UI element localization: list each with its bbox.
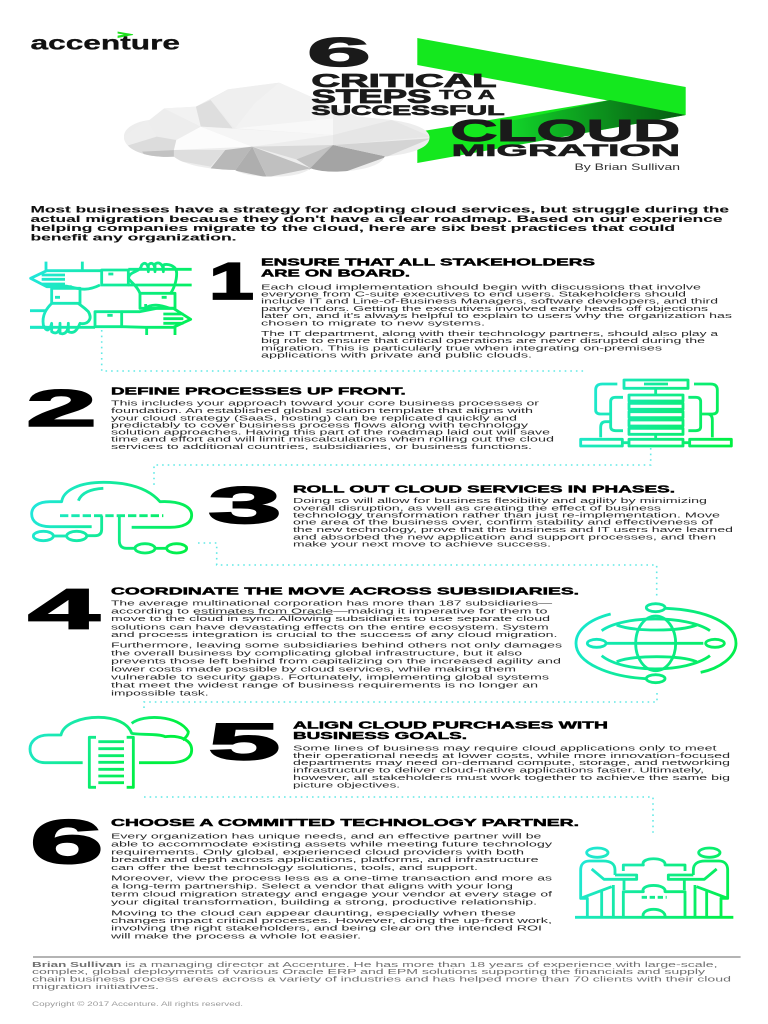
header graphic: green chevron: [417, 38, 686, 163]
byline: By Brian Sullivan: [574, 162, 680, 173]
step 2 text: [111, 386, 554, 451]
number 1: 1: [209, 253, 254, 311]
step 2 body: [111, 399, 554, 451]
step 1 text: [261, 258, 732, 360]
step 6 body: Every organization has unique needs, and an effective partner will be: [111, 831, 541, 840]
step 2 body: predictably to cover business process flows along with technology: [111, 420, 528, 429]
step 3 body: and absorbed the new application and support processes, and then: [293, 532, 716, 541]
step 3 text: [293, 484, 733, 548]
author bio: migration initiatives.: [32, 982, 159, 991]
step 1 body: big role to ensure that critical operations are never disrupted during the: [261, 336, 705, 345]
step 1 body: party vendors. Getting the executives involved early heads off objections: [261, 304, 708, 313]
step 3 body: Doing so will allow for business flexibility and agility by minimizing: [293, 496, 707, 505]
step 4 text: [111, 587, 579, 698]
icon: server stack: [581, 380, 731, 446]
step 3 heading: ROLL OUT CLOUD SERVICES IN PHASES.: [293, 484, 675, 495]
step 1 body: [261, 282, 732, 360]
step 5 body: picture objectives.: [293, 781, 400, 790]
header graphic: low-poly cloud: [122, 80, 431, 178]
step 5 heading: [293, 720, 608, 742]
step 1 body: applications with private and public clouds.: [261, 351, 532, 360]
number 6: 6: [30, 807, 103, 876]
title: STEPS: [312, 87, 432, 108]
step 5 heading: ALIGN CLOUD PURCHASES WITH: [293, 720, 608, 731]
step 6 body: changes impact critical processes. However, doing the up-front work,: [111, 916, 552, 925]
step 6 body: Moving to the cloud can appear daunting, especially when these: [111, 909, 516, 918]
step 1 body: later on, and it's always helpful to explain to users why the organization has: [261, 311, 732, 320]
step 2 body: your cloud strategy (SaaS, hosting) can be replicated quickly and: [111, 413, 517, 422]
author bio: chain business process areas across a variety of industries and has helped more than 70 clients with their cloud: [32, 974, 731, 983]
title: CLOUD: [451, 113, 680, 148]
step 1 heading: [261, 258, 596, 279]
intro text: Most businesses have a strategy for adopting cloud services, but struggle during the: [30, 204, 729, 214]
step 4 body: The average multinational corporation has more than 187 subsidiaries—: [111, 598, 553, 608]
step 3 body: technology transformation rather than just re-implementation. Move: [293, 511, 720, 520]
step 4 body: according to estimates from Oracle—making it imperative for them to: [111, 606, 548, 615]
title: SUCCESSFUL: [312, 102, 505, 118]
step 5 heading: BUSINESS GOALS.: [293, 731, 467, 742]
step 3 body: [293, 496, 733, 548]
step 2 body: This includes your approach toward your core business processes or: [111, 399, 540, 408]
step 2 body: services to additional countries, subsidiaries, or business functions.: [111, 442, 532, 451]
step 4 body: prevents those left behind from capitalizing on the increased agility and: [111, 657, 561, 666]
step 1 heading: ARE ON BOARD.: [261, 268, 410, 279]
intro text: actual migration because they don't have a clear roadmap. Based on our experience: [30, 214, 722, 224]
step 1 body: The IT department, along with their technology partners, should also play a: [261, 329, 719, 338]
step 1 body: include IT and Line-of-Business Managers, software developers, and third: [261, 297, 718, 306]
icon: four interlocked hands: [30, 262, 192, 335]
step 4 heading: COORDINATE THE MOVE ACROSS SUBSIDIARIES.: [111, 587, 579, 598]
step 5 body: departments may need on-demand compute, storage, and networking: [293, 758, 730, 767]
number 2: 2: [26, 379, 97, 437]
step 6 body: able to accommodate existing assets while meeting future technology: [111, 840, 552, 849]
icon: cloud network: [32, 482, 192, 553]
step 6 body: a long-term partnership. Select a vendor that aligns with your long: [111, 882, 513, 891]
step 5 body: their operational needs at lower costs, while more innovation-focused: [293, 751, 730, 760]
copyright: Copyright © 2017 Accenture. All rights reserved.: [32, 1000, 243, 1008]
intro text: [30, 204, 729, 242]
number 4: 4: [28, 578, 100, 641]
step 3 body: overall disruption, as well as creating the effect of business: [293, 503, 661, 512]
logo: accenture: [30, 32, 180, 54]
step 4 body: and process integration is crucial to the success of any cloud migration.: [111, 630, 558, 639]
step 4 body: the overall business by complicating global infrastructure, but it also: [111, 649, 522, 658]
divider rule: [33, 956, 741, 958]
connector 1 to 2: [102, 330, 586, 371]
step 3 body: one area of the business over, confirm stability and effectiveness of: [293, 518, 715, 527]
step 1 body: everyone from C-suite executives to end users. Stakeholders should: [261, 290, 686, 298]
logo: accenture: accenture: [30, 34, 180, 54]
title: TO A: [439, 87, 496, 102]
step 3 body: make your next move to achieve success.: [293, 539, 551, 548]
icon: cloud with ladder: [30, 717, 192, 787]
step 6 body: requirements. Only global, experienced cloud providers with both: [111, 847, 524, 856]
step 5 text: [293, 720, 730, 790]
step 5 body: [293, 744, 730, 790]
connector 3 to 4: [198, 543, 657, 597]
connector 2 to 3: [154, 448, 651, 485]
step 1 body: chosen to migrate to new systems.: [261, 318, 485, 327]
intro text: helping companies migrate to the cloud, here are six best practices that could: [30, 223, 675, 233]
step 4 body: solutions can have devastating effects on the entire ecosystem. System: [111, 622, 549, 631]
intro text: benefit any organization.: [30, 232, 236, 242]
step 6 body: involving the right stakeholders, and being clear on the intended ROI: [111, 924, 542, 933]
step 4 body: Furthermore, leaving some subsidiaries behind others not only damages: [111, 641, 562, 650]
step 5 body: however, all stakeholders must work together to achieve the same big: [293, 773, 730, 782]
step 6 body: Moreover, view the process less as a one-time transaction and more as: [111, 874, 552, 883]
connector 4 to 5: [144, 693, 657, 708]
step 1 body: migration. This is particularly true when integrating on-premises: [261, 344, 662, 352]
step 1 heading: ENSURE THAT ALL STAKEHOLDERS: [261, 258, 596, 269]
step 4 body: lower costs made possible by cloud services, while making them: [111, 665, 516, 674]
step 6 body: will make the process a whole lot easier.: [109, 932, 361, 941]
step 5 body: Some lines of business may require cloud applications only to meet: [293, 744, 718, 753]
step 2 heading: DEFINE PROCESSES UP FRONT.: [111, 386, 406, 397]
author bio: complex, global deployments of various Oracle ERP and EPM solutions supporting the financials and supply: [32, 967, 705, 976]
step 6 body: [109, 831, 554, 941]
number 5: 5: [208, 712, 280, 771]
title: MIGRATION: [452, 142, 680, 160]
author bio: [32, 960, 731, 991]
step 2 body: time and effort and will limit miscalculations when rolling out the cloud: [111, 435, 554, 444]
title: [307, 29, 680, 160]
step 6 text: [109, 818, 579, 941]
step 4 body: move to the cloud in sync. Allowing subsidiaries to use separate cloud: [111, 614, 550, 623]
step 6 heading: CHOOSE A COMMITTED TECHNOLOGY PARTNER.: [111, 818, 579, 829]
connector 5 to 6: [144, 797, 653, 835]
step 1 body: Each cloud implementation should begin with discussions that involve: [261, 282, 701, 291]
step 6 body: term cloud migration strategy and engage your vendor at every stage of: [111, 890, 554, 899]
step 4 body: [111, 598, 562, 698]
author bio: is a managing director at Accenture. He has more than 18 years of experience with large-scale,: [125, 960, 718, 969]
step 4 body: that meet the widest range of business requirements is no longer an: [111, 681, 538, 690]
step 2 body: foundation. An established global solution template that aligns with: [111, 406, 533, 415]
step 6 body: your digital transformation, building a strong, productive relationship.: [111, 897, 537, 906]
author bio: Brian Sullivan: [32, 960, 122, 969]
number 3: 3: [208, 477, 282, 534]
title: 6: [307, 29, 371, 75]
step 4 body: vulnerable to security gaps. Fortunately, implementing global systems: [111, 673, 549, 682]
step 2 body: solution approaches. Having this part of the roadmap laid out will save: [111, 428, 550, 437]
step 3 body: the new technology, prove that the business and IT users have learned: [293, 525, 733, 534]
step 6 body: can offer the best technology solutions, tools, and support.: [111, 863, 478, 872]
icon: people with puzzle: [575, 848, 733, 917]
step 4 body: impossible task.: [111, 689, 209, 698]
step 5 body: infrastructure to deliver cloud-native applications faster. Ultimately,: [293, 766, 704, 775]
icon: globe network: [576, 604, 736, 683]
step 6 body: breadth and depth across applications, platforms, and infrastructure: [111, 855, 539, 864]
title: CRITICAL: [312, 71, 496, 91]
